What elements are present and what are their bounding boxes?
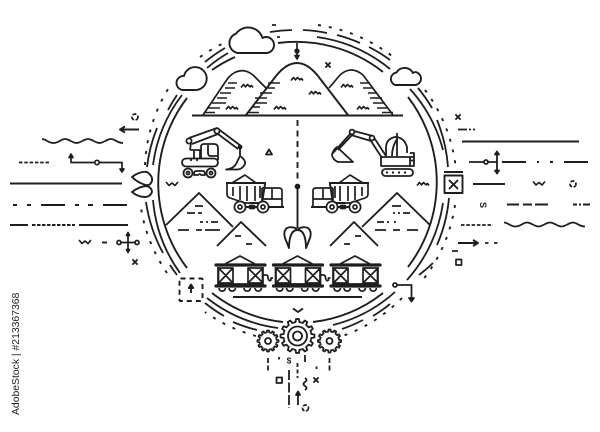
dollar sign: $ [287,356,292,366]
icon: small triangle [266,150,272,154]
left dashed [267,358,269,373]
dump truck: right [311,175,369,213]
squiggle right [417,182,429,186]
arrow right [458,240,478,246]
icon: square [276,378,282,383]
cloud: small left [176,67,207,90]
dash line [507,204,590,206]
squiggle left [166,182,178,186]
wagon 2 [274,256,322,291]
line [473,183,505,185]
claw grabber [284,184,311,248]
wagon 3 [331,256,380,291]
mountain: centre [246,63,348,115]
hatching [204,83,393,112]
pyramid: large left [166,193,233,230]
dashes [485,242,498,244]
dash [452,250,458,252]
pyramid: large right [362,193,430,230]
pyramid: small right [330,222,378,246]
centre dashed [296,363,298,378]
squiggle [533,182,545,185]
connector row [469,152,588,174]
dump truck: left [226,175,284,213]
ground line [192,114,403,116]
mountain: right [329,70,393,115]
dashes [19,162,50,164]
dot [316,366,318,369]
letter S: S [478,202,488,208]
train wagons [216,256,380,297]
right dashed [328,358,330,373]
icon: square [456,260,462,265]
wave left [42,139,123,143]
cloud: small right [391,68,421,85]
arrow: left pointing [120,126,139,132]
wave right [504,222,585,226]
crossed box [444,172,463,193]
arrow: top connector [295,43,299,59]
squiggles on mountains [226,78,369,110]
gears [257,319,341,353]
dashes [461,224,493,226]
dash [102,242,107,244]
excavator: right [332,130,414,176]
icon: small cross top [325,62,331,68]
connector with arrows [69,154,124,172]
dashed centre cable [296,120,298,181]
pyramid: small left [217,222,266,246]
dot [278,357,280,360]
icon: cross [132,259,138,265]
line [10,182,122,184]
icon: recycle [570,181,576,187]
short tick [304,355,306,362]
gear: left [257,330,279,352]
ring: outer segments [146,30,449,330]
long dashed [288,370,290,408]
couplings [263,275,330,281]
icon: recycle [132,114,138,120]
arrow up [296,392,300,405]
excavator: left [182,128,245,178]
cross connector [117,232,139,252]
ring: inner circle segments [158,42,437,322]
connector arrow: lower right [393,283,414,302]
dashed arrow box [180,278,202,301]
ring: dotted segments [141,25,456,337]
line [462,140,579,142]
mountain: left [203,71,266,115]
squiggle [79,240,91,244]
dash [458,128,475,130]
bottom marks [268,355,330,411]
right side lines [444,114,590,265]
dotted segment [32,224,75,226]
cloud: large [229,27,274,53]
gear: main [281,319,314,353]
gear: right [318,329,341,353]
stock credit: AdobeStock | #213367368 [11,292,22,415]
dash line [13,204,127,206]
icon: cross [455,114,461,120]
squiggle vertical [304,378,306,390]
mountains [192,63,403,116]
icon: recycle [302,405,308,411]
ring: middle segments [153,37,443,328]
wagon 1 [216,256,265,291]
chevron [293,308,303,312]
circular ring frame [141,25,456,337]
left side lines [10,114,152,265]
rail [233,296,362,298]
icon: cross [313,377,319,383]
petals [132,172,152,197]
dash line [10,224,128,226]
